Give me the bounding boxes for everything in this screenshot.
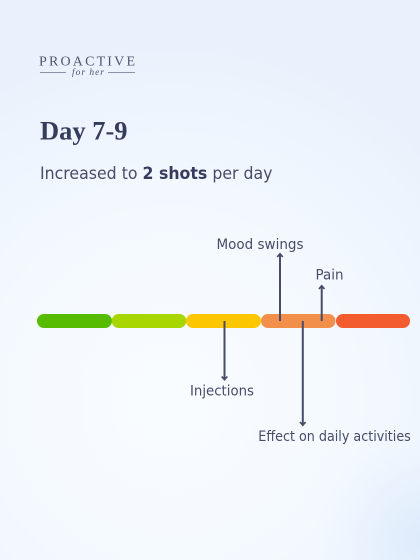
arrow: pain xyxy=(319,286,324,321)
logo: Proactive for her: for her xyxy=(72,67,104,78)
segment: red xyxy=(336,314,410,328)
heading: Day 7-9: Day 7-9 xyxy=(40,116,128,146)
segment: lime xyxy=(112,314,186,328)
arrow: effect on daily activities xyxy=(300,321,306,425)
subheading: shots per day: Increased to 2 shots per day xyxy=(40,164,272,184)
arrow: mood swings xyxy=(277,254,283,321)
severity scale bar xyxy=(37,314,410,328)
segment: yellow xyxy=(186,314,261,328)
logo: Proactive for her: PROACTIVE xyxy=(39,54,135,70)
arrow: injections xyxy=(222,321,227,380)
segment: green xyxy=(37,314,112,328)
segment: orange xyxy=(261,314,336,328)
label: pain: Pain xyxy=(316,267,344,283)
logo: Proactive for her xyxy=(39,54,135,78)
label: injections: Injections xyxy=(190,383,254,399)
label: mood swings: Mood swings xyxy=(216,237,304,253)
